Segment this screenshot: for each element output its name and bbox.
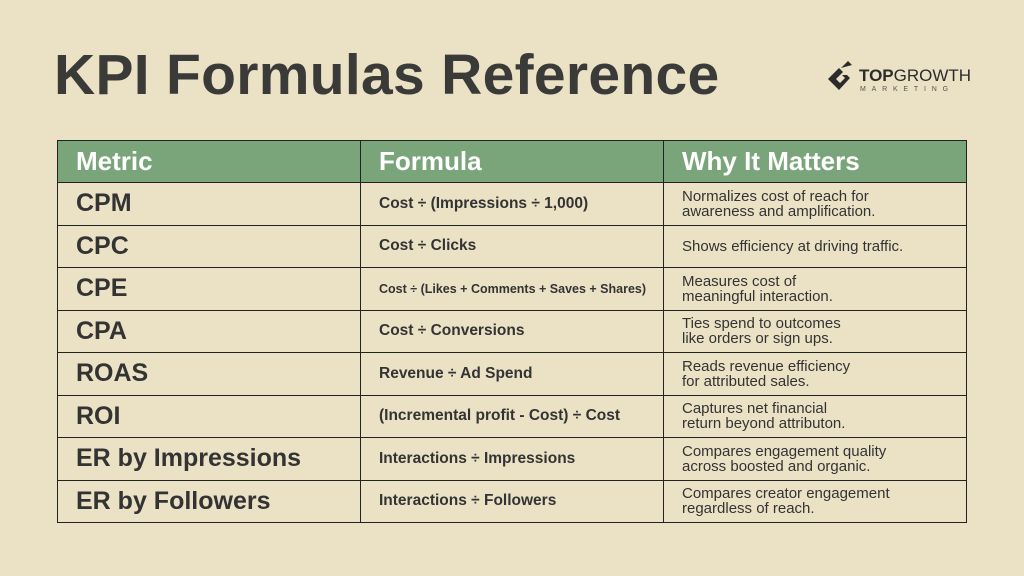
table: KPI formulas: like orders or sign ups. [682, 330, 833, 347]
table: KPI formulas: Shows efficiency at driving traffic. [682, 238, 903, 255]
table: KPI formulas: ER by Followers [76, 487, 270, 515]
table: KPI formulas: ROAS [76, 359, 148, 387]
table: KPI formulas: CPC [76, 232, 129, 260]
table: KPI formulas: Cost ÷ (Likes + Comments + Saves + Shares) [379, 282, 646, 296]
table: KPI formulas: Cost ÷ Conversions [379, 322, 524, 339]
table: KPI formulas: (Incremental profit - Cost) ÷ Cost [379, 407, 620, 424]
title: KPI Formulas Reference [54, 43, 720, 107]
table: KPI formulas: Interactions ÷ Impressions [379, 450, 575, 467]
table: KPI formulas: CPE [76, 274, 127, 302]
table: KPI formulas: awareness and amplification. [682, 203, 875, 220]
table: KPI formulas: Revenue ÷ Ad Spend [379, 365, 532, 382]
table: KPI formulas: meaningful interaction. [682, 288, 833, 305]
table: KPI formulas: across boosted and organic. [682, 458, 870, 475]
table: KPI formulas: Compares engagement quality [682, 443, 886, 460]
table: KPI formulas: ROI [76, 402, 120, 430]
table: KPI formulas: CPA [76, 317, 127, 345]
logo: top growth marketing [828, 61, 971, 93]
table: KPI formulas: regardless of reach. [682, 500, 815, 517]
table: KPI formulas: Reads revenue efficiency [682, 358, 850, 375]
table: KPI formulas: Compares creator engagement [682, 485, 890, 502]
table: KPI formulas: Measures cost of [682, 273, 796, 290]
table: KPI formulas: CPM [76, 189, 132, 217]
table: KPI formulas: Interactions ÷ Followers [379, 492, 556, 509]
table: KPI formulas: Cost ÷ (Impressions ÷ 1,000) [379, 195, 588, 212]
logo: top growth marketing: TOPGROWTH [859, 66, 971, 85]
table: KPI formulas: Captures net financial [682, 400, 827, 417]
table: KPI formulas: return beyond attributon. [682, 415, 845, 432]
table: KPI formulas: Normalizes cost of reach for [682, 188, 869, 205]
table: KPI formulas: Ties spend to outcomes [682, 315, 841, 332]
table: KPI formulas [57, 140, 967, 523]
table: KPI formulas: Why It Matters [682, 146, 860, 176]
table: KPI formulas: for attributed sales. [682, 373, 810, 390]
table: KPI formulas: Cost ÷ Clicks [379, 237, 476, 254]
table: KPI formulas: ER by Impressions [76, 444, 301, 472]
table: KPI formulas: Metric [76, 146, 153, 176]
logo: top growth marketing: MARKETING [860, 86, 954, 93]
table: KPI formulas: Formula [379, 146, 482, 176]
